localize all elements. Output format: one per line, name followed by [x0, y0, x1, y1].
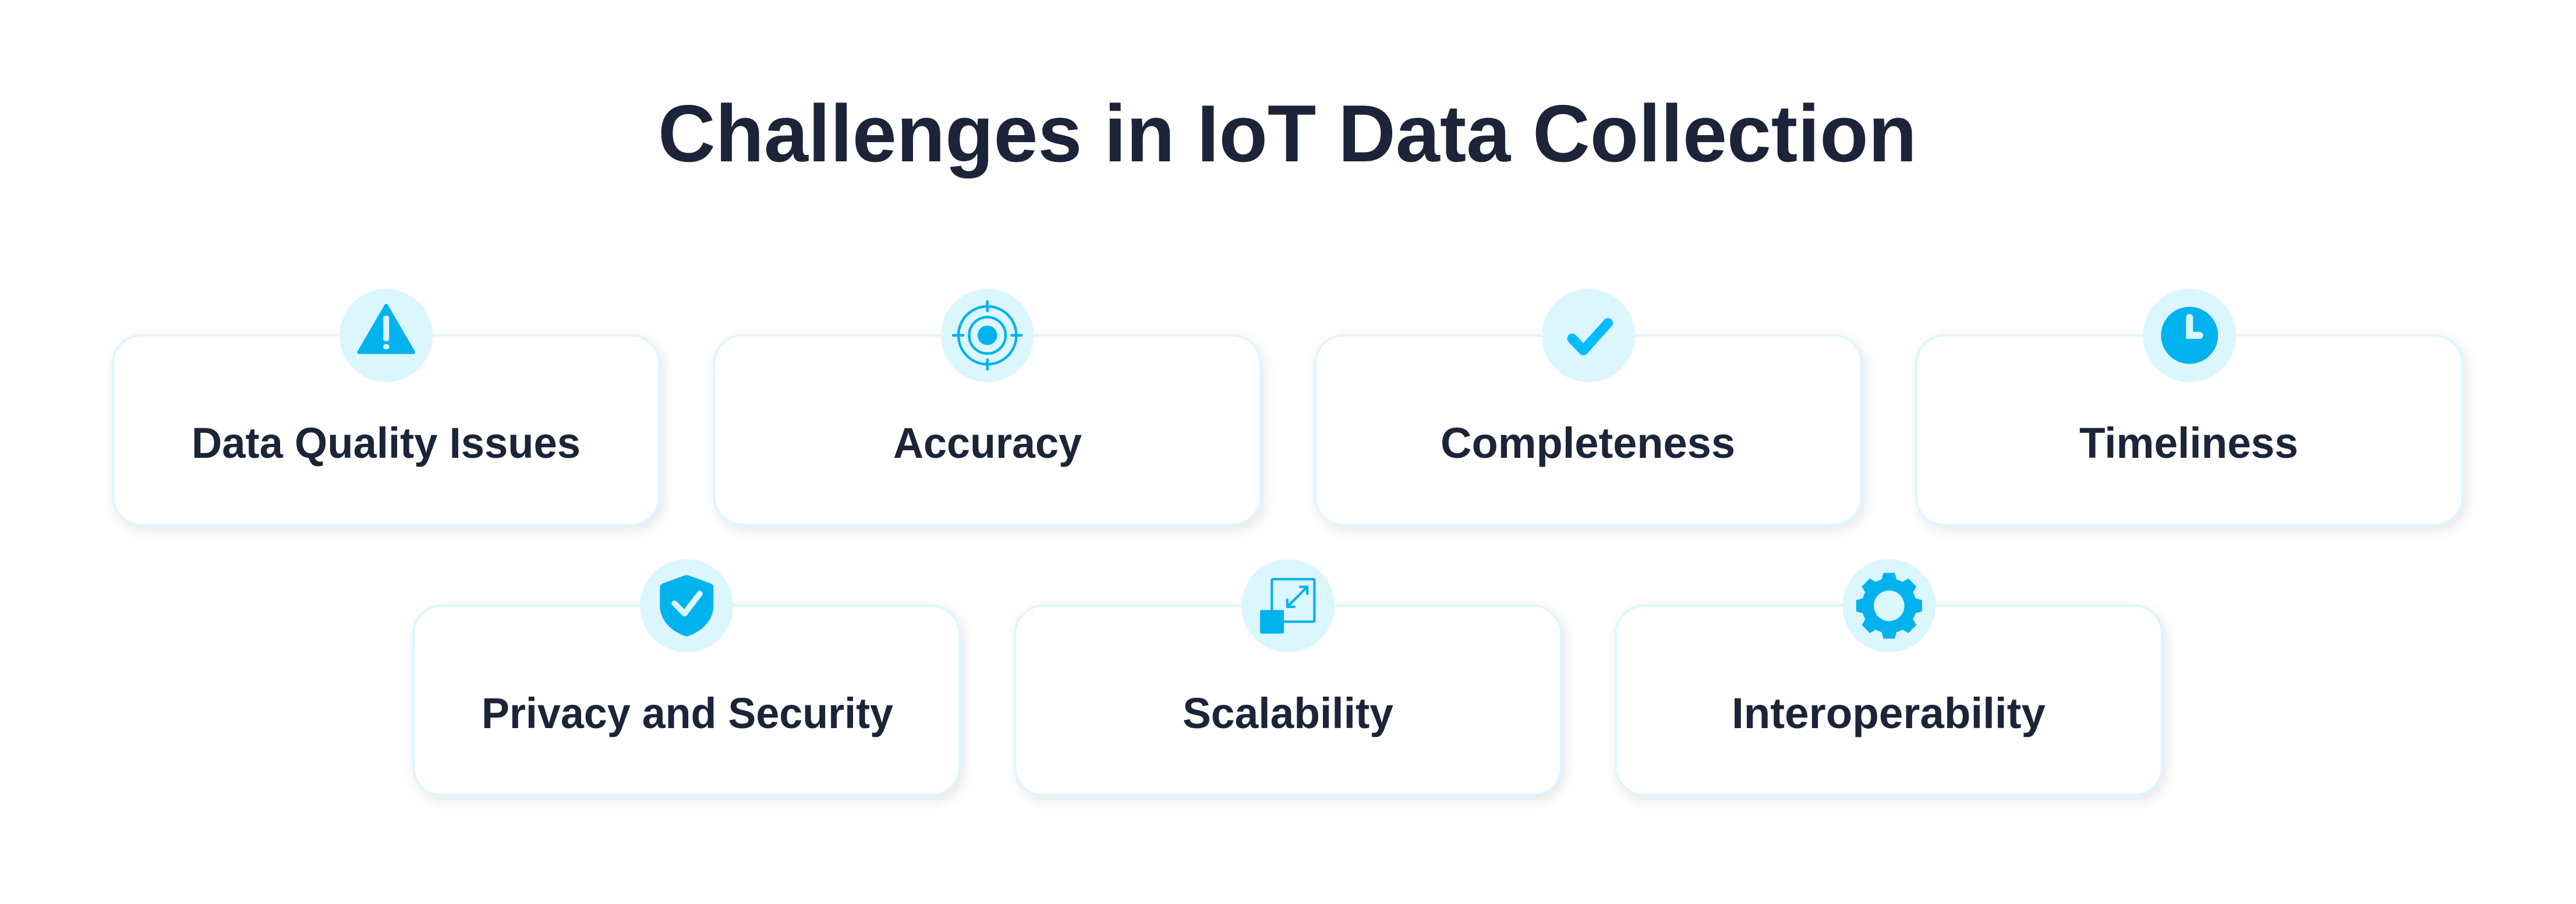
panel: Completeness: [1315, 289, 1862, 525]
icon: target: [941, 289, 1034, 382]
icon: warning triangle: [339, 289, 433, 382]
icon: clock: [2143, 289, 2236, 382]
label: Completeness: Completeness: [1441, 419, 1735, 467]
icon: shield: [640, 559, 733, 652]
label: Privacy and Security: Privacy and Security: [482, 689, 893, 737]
label: Scalability: Scalability: [1183, 689, 1393, 737]
label: Timeliness: Timeliness: [2079, 419, 2298, 467]
panel: Interoperability: [1616, 559, 2162, 795]
icon: check mark: [1542, 289, 1635, 382]
label: Interoperability: Interoperability: [1732, 689, 2046, 737]
panel: Accuracy: [714, 289, 1260, 525]
panel: Privacy and Security: [413, 559, 960, 795]
icon: gear: [1842, 559, 1935, 652]
icon: resize squares: [1241, 559, 1335, 652]
panel: Timeliness: [1916, 289, 2462, 525]
title: Challenges in IoT Data Collection: [658, 89, 1917, 179]
panel: Data Quality Issues: [113, 289, 659, 525]
label: Accuracy: Accuracy: [893, 419, 1082, 467]
label: Data Quality Issues: Data Quality Issues: [192, 419, 581, 467]
panel: Scalability: [1015, 559, 1561, 795]
